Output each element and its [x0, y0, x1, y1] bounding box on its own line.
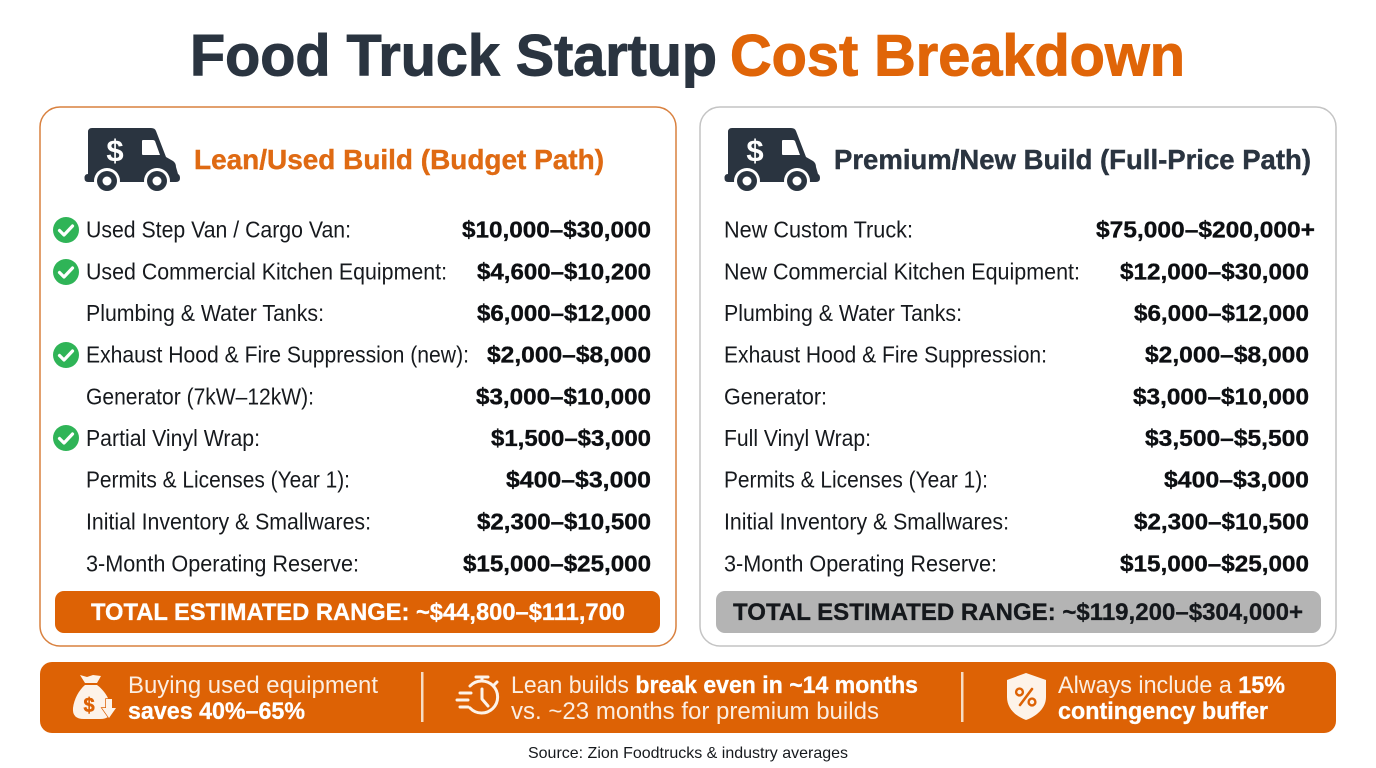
row: permits: Permits & Licenses (Year 1):: [86, 466, 350, 492]
row: generator: Generator:: [724, 384, 827, 410]
row: partial vinyl wrap: $1,500–$3,000: [491, 425, 651, 451]
row: exhaust hood: Exhaust Hood & Fire Suppression:: [724, 342, 1047, 368]
text: contingency buffer: Always include a 15%: [1058, 672, 1285, 699]
row: used kitchen equipment: $4,600–$10,200: [477, 258, 651, 284]
icon: check exhaust hood: [53, 342, 79, 368]
row: generator: [86, 384, 651, 410]
row: partial vinyl wrap: Partial Vinyl Wrap:: [86, 425, 260, 451]
text: used equipment savings: saves 40%–65%: [128, 698, 305, 725]
row: full vinyl wrap: [724, 425, 1309, 451]
text: used equipment savings: Buying used equipment: [128, 672, 378, 699]
heading: premium/new build: Premium/New Build (Full-Price Path): [834, 144, 1311, 175]
icon: delivery van with dollar sign: $: [106, 133, 124, 168]
row: exhaust hood: Exhaust Hood & Fire Suppression (new):: [86, 342, 469, 368]
row: full vinyl wrap: Full Vinyl Wrap:: [724, 425, 871, 451]
row: inventory: [86, 508, 651, 534]
row: inventory: Initial Inventory & Smallwares:: [724, 508, 1009, 534]
row: inventory: $2,300–$10,500: [477, 508, 651, 534]
row: reserve: 3-Month Operating Reserve:: [724, 550, 997, 576]
panel: lean/used build: [40, 107, 676, 646]
text: contingency buffer: [1058, 672, 1285, 725]
title: Food Truck Startup: [190, 24, 717, 88]
row: reserve: [724, 550, 1309, 576]
row: permits: [724, 466, 1309, 492]
icon: shield with percent: [1007, 673, 1046, 720]
row: used kitchen equipment: [86, 258, 651, 284]
row: permits: $400–$3,000: [506, 466, 651, 492]
row: reserve: $15,000–$25,000: [1120, 550, 1309, 576]
row: reserve: $15,000–$25,000: [463, 550, 651, 576]
row: new truck: New Custom Truck:: [724, 216, 913, 242]
row: generator: $3,000–$10,000: [476, 384, 651, 410]
row: new truck: [724, 216, 1315, 242]
row: exhaust hood: $2,000–$8,000: [1145, 342, 1309, 368]
icon: money bag with down arrow: [73, 675, 116, 719]
row: inventory: [724, 508, 1309, 534]
row: new truck: $75,000–$200,000+: [1096, 216, 1315, 242]
row: plumbing: $6,000–$12,000: [1134, 300, 1309, 326]
title: [190, 24, 1185, 88]
icon: delivery van with dollar sign: [724, 128, 820, 194]
row: inventory: Initial Inventory & Smallwares:: [86, 508, 371, 534]
row: exhaust hood: [724, 342, 1309, 368]
row: reserve: [86, 550, 651, 576]
row: reserve: 3-Month Operating Reserve:: [86, 550, 359, 576]
icon: delivery van with dollar sign: [84, 128, 180, 194]
row: plumbing: $6,000–$12,000: [477, 300, 651, 326]
callout bar: key takeaways: [40, 662, 1336, 733]
source note: Source: Zion Foodtrucks & industry averages: [528, 745, 848, 762]
row: used step van: [86, 216, 651, 242]
text: break even: Lean builds break even in ~14 months: [511, 672, 918, 699]
row: inventory: $2,300–$10,500: [1134, 508, 1309, 534]
row: plumbing: Plumbing & Water Tanks:: [724, 300, 962, 326]
title: Cost Breakdown: [730, 24, 1185, 88]
icon: check used van: [53, 217, 79, 243]
total bar: premium: TOTAL ESTIMATED RANGE: ~$119,200–$304,000+: [733, 599, 1303, 626]
row: plumbing: [724, 300, 1309, 326]
icon: stopwatch with speed lines: [457, 677, 498, 713]
row: used kitchen equipment: Used Commercial Kitchen Equipment:: [86, 258, 447, 284]
row: permits: $400–$3,000: [1164, 466, 1309, 492]
row: new kitchen equipment: $12,000–$30,000: [1120, 258, 1309, 284]
row: permits: Permits & Licenses (Year 1):: [724, 466, 988, 492]
row: plumbing: Plumbing & Water Tanks:: [86, 300, 324, 326]
icon: check vinyl wrap: [53, 425, 79, 451]
icon: check used kitchen: [53, 259, 79, 285]
row: generator: $3,000–$10,000: [1133, 384, 1309, 410]
icon: money bag with down arrow: $: [83, 695, 95, 717]
icon: delivery van with dollar sign: $: [746, 133, 764, 168]
heading: lean/used build: Lean/Used Build (Budget Path): [194, 144, 604, 175]
text: break even: [511, 672, 918, 725]
row: new kitchen equipment: [724, 258, 1309, 284]
total bar: lean: [55, 591, 660, 633]
text: break even: vs. ~23 months for premium builds: [511, 698, 879, 725]
row: full vinyl wrap: $3,500–$5,500: [1145, 425, 1309, 451]
total bar: lean: TOTAL ESTIMATED RANGE: ~$44,800–$111,700: [91, 599, 625, 626]
row: plumbing: [86, 300, 651, 326]
row: generator: Generator (7kW–12kW):: [86, 384, 314, 410]
row: generator: [724, 384, 1309, 410]
text: contingency buffer: contingency buffer: [1058, 698, 1268, 725]
row: used step van: Used Step Van / Cargo Van:: [86, 216, 351, 242]
row: exhaust hood: $2,000–$8,000: [487, 342, 651, 368]
row: new kitchen equipment: New Commercial Kitchen Equipment:: [724, 258, 1080, 284]
panel: premium/new build: [700, 107, 1336, 646]
total bar: premium: [716, 591, 1321, 633]
text: used equipment savings: [128, 672, 378, 725]
row: permits: [86, 466, 651, 492]
row: used step van: $10,000–$30,000: [462, 216, 651, 242]
row: partial vinyl wrap: [86, 425, 651, 451]
